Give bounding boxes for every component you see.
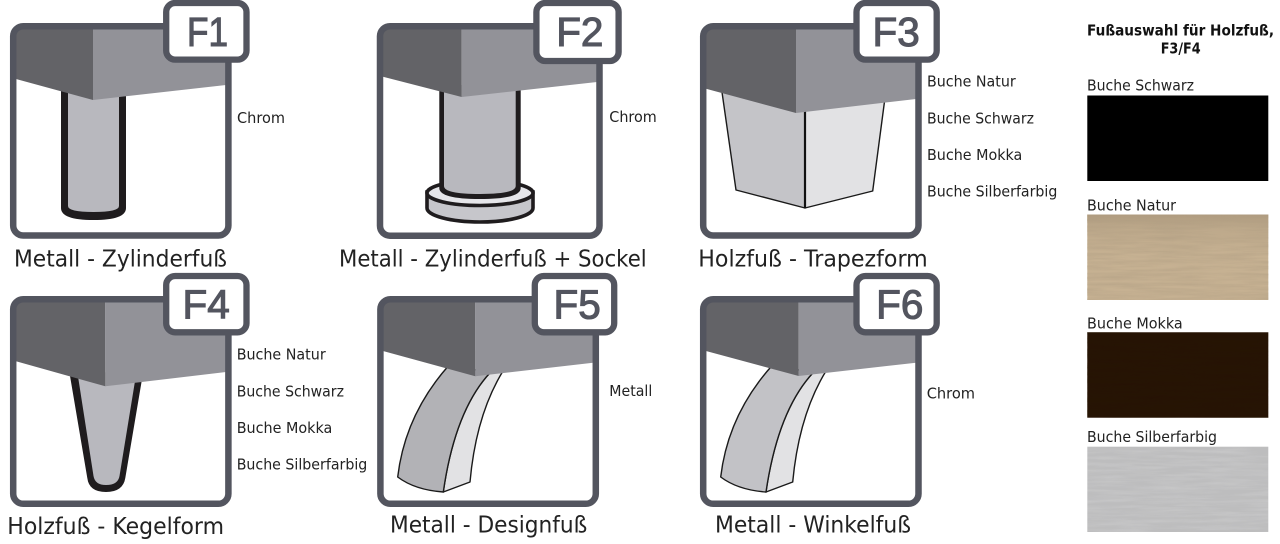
panel: wood finish selection [1087,22,1274,532]
badge F2 [536,3,619,61]
caption: Metall - Zylinderfuß + Sockel [339,244,647,272]
swatch: Buche Natur: Buche Natur [1087,197,1177,215]
badge F2: F2 [556,9,603,55]
cushion block [383,29,597,97]
panel: F3 Holzfuß Trapezform [698,3,1057,272]
material labels: Buche Natur [927,73,1016,91]
swatch: Buche Schwarz [1087,77,1268,181]
material labels [927,73,1057,201]
frame [703,26,918,236]
material labels: Buche Mokka [927,146,1022,164]
material label: Chrom [927,385,975,403]
caption: Holzfuß - Kegelform [7,512,224,540]
badge F4: F4 [182,282,230,328]
frame [703,299,918,504]
caption: Metall - Zylinderfuß [14,244,227,272]
leg: cone [69,370,143,492]
material labels: Buche Schwarz [237,382,344,400]
heading [1087,22,1274,57]
panel: F5 Metall Designfuß [380,276,652,539]
badge F4 [166,276,246,332]
material label: Chrom [609,108,657,126]
caption: Holzfuß - Trapezform [698,244,928,272]
caption: Metall - Designfuß [390,511,587,539]
badge F1 [166,3,246,60]
leg: cylinder [61,85,126,220]
material labels: Buche Mokka [237,419,332,437]
panel: F1 Metall Zylinderfuß [13,3,285,272]
leg: curved [721,366,826,492]
material labels: Buche Schwarz [927,109,1034,127]
cushion block [16,302,226,386]
badge F5 [535,276,614,332]
leg: curved [398,366,503,492]
swatch: Buche Silberfarbig [1087,428,1268,532]
panel: F6 Metall Winkelfuß [703,276,975,539]
material label: Chrom [237,109,285,127]
frame [13,299,228,504]
swatch: Buche Mokka: Buche Mokka [1087,315,1183,333]
frame [380,299,596,504]
leg: trapezoid [722,90,885,208]
frame [13,26,228,236]
swatch: Buche Silberfarbig: Buche Silberfarbig [1087,428,1217,446]
frame [380,26,600,236]
cushion block [706,29,916,113]
material labels [237,346,367,474]
material label: Metall [609,382,652,400]
badge F3 [856,3,937,60]
panel: F4 Holzfuß Kegelform [7,276,367,540]
cushion block [706,302,916,376]
swatch: Buche Mokka [1087,315,1268,418]
heading: F3/F4 [1161,39,1201,57]
material labels: Buche Natur [237,346,326,364]
caption: Metall - Winkelfuß [715,511,911,539]
badge F6: F6 [876,282,923,328]
panel: F2 Metall Zylinderfuß + Sockel [339,3,657,272]
leg: cylinder [439,85,521,199]
cushion block [383,302,593,376]
badge F1: F1 [187,9,228,55]
socket base [427,180,533,222]
material labels: Buche Silberfarbig [927,183,1057,201]
badge F6 [856,276,937,332]
cushion block [16,29,226,100]
badge F3: F3 [872,9,920,55]
badge F5: F5 [554,282,601,328]
swatch: Buche Natur [1087,197,1268,300]
material labels: Buche Silberfarbig [237,456,367,474]
swatch: Buche Schwarz: Buche Schwarz [1087,77,1194,95]
